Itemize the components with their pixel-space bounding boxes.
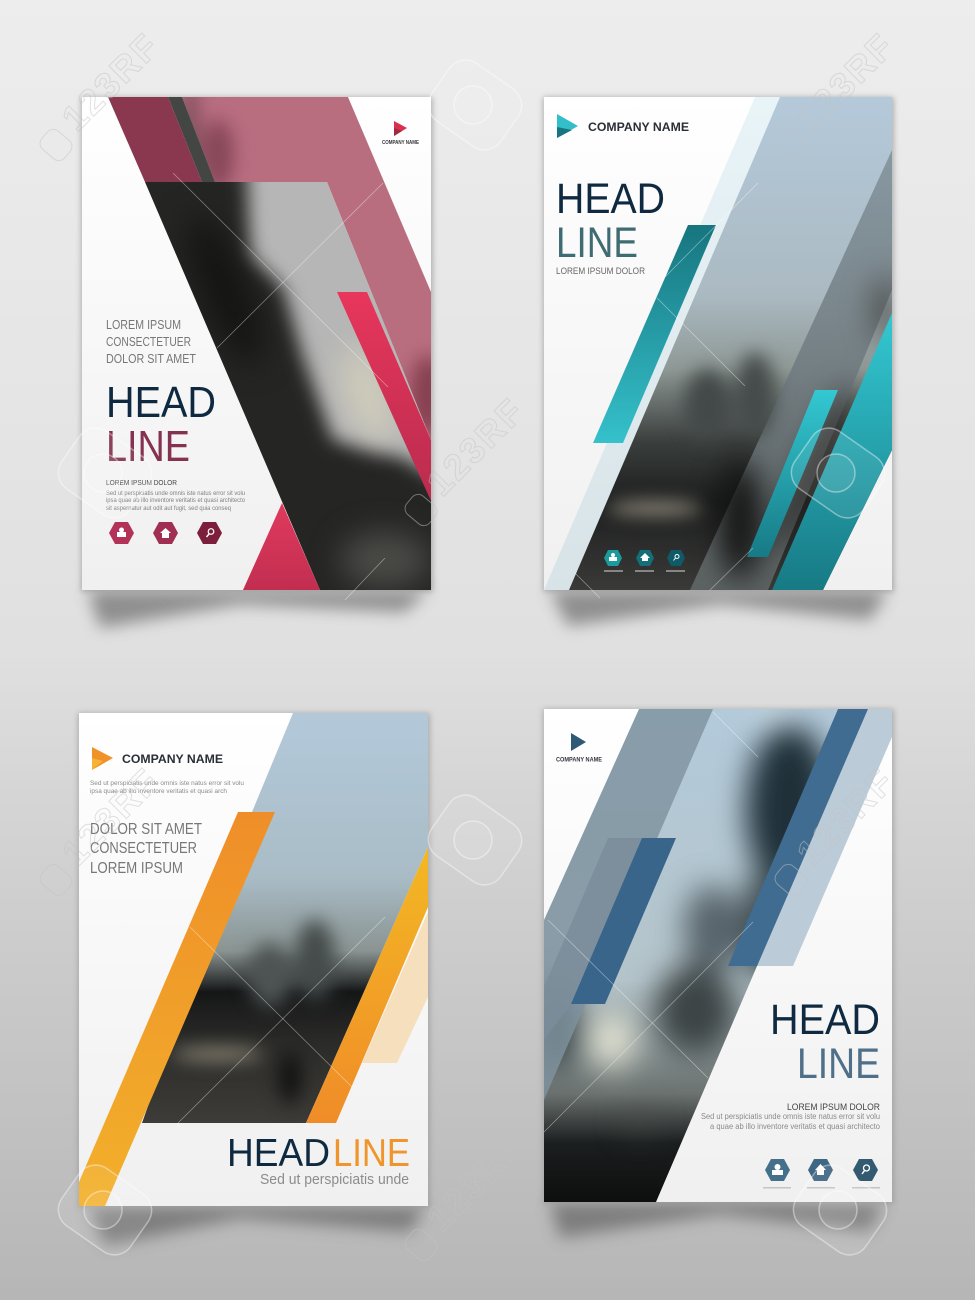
panel: teal brochure <box>544 97 897 590</box>
teal strips <box>593 225 716 443</box>
photo: blurred city blue <box>544 709 868 1202</box>
logo: COMPANY NAME <box>556 758 602 764</box>
body text: a quae ab illo inventore veritatis et quasi architecto <box>710 1122 881 1131</box>
body text: Sed ut perspiciatis unde omnis iste natus error sit volu <box>106 491 245 497</box>
subheading: LOREM IPSUM <box>90 860 183 877</box>
dark red band <box>108 97 202 182</box>
logo <box>557 114 689 138</box>
body text <box>106 478 246 512</box>
headline: HEAD <box>770 996 880 1044</box>
body text: LOREM IPSUM DOLOR <box>787 1102 880 1113</box>
body text: LOREM IPSUM DOLOR <box>106 478 178 487</box>
subheading: DOLOR SIT AMET <box>90 821 202 838</box>
subheading: LOREM IPSUM <box>106 317 181 332</box>
watermark: 123RF logos: 123RF <box>419 391 531 504</box>
tagline: Sed ut perspiciatis unde <box>260 1172 409 1188</box>
headline: LINE <box>556 219 638 267</box>
card edge shadows <box>78 97 894 1208</box>
pink triangle <box>243 503 320 590</box>
watermark: 123RF logos: 123RF <box>789 761 901 874</box>
panel: red brochure <box>82 97 431 590</box>
lower strips <box>544 838 642 1040</box>
photo: blurred city orange <box>142 713 428 1123</box>
watermark: thin cross lines <box>173 173 758 1132</box>
headline <box>106 378 216 471</box>
icons: hexagons <box>109 522 222 544</box>
icons: hexagons <box>604 550 685 572</box>
subheading: CONSECTETUER <box>90 840 197 857</box>
body text: sit aspernatur aut odit aut fugit, sed quia conseq <box>106 506 231 512</box>
pale strip <box>544 97 780 590</box>
card shadows <box>88 590 888 1246</box>
watermark: 123RF logos: 123RF <box>789 26 901 139</box>
logo <box>92 747 223 770</box>
body text: Sed ut perspiciatis unde omnis iste natus error sit volu <box>701 1112 880 1121</box>
watermark: 123RF logos: 123RF <box>54 761 166 874</box>
watermark: 123RF logos: 123RF <box>419 1126 531 1239</box>
headline <box>556 175 665 267</box>
headline <box>227 1132 410 1175</box>
icons: hexagons <box>763 1159 880 1188</box>
subheading: LOREM IPSUM DOLOR <box>556 266 645 277</box>
subheading: CONSECTETUER <box>106 334 191 349</box>
blue strip <box>728 709 868 966</box>
grey strip <box>168 97 215 182</box>
orange strips <box>79 812 275 1206</box>
logo: COMPANY NAME <box>588 120 689 134</box>
subheading: DOLOR SIT AMET <box>106 351 196 366</box>
subheading <box>90 821 202 877</box>
photo: blurred city teal <box>544 97 897 590</box>
photo: pink overlay <box>182 97 431 440</box>
headline: HEAD <box>227 1132 330 1175</box>
pink strip <box>337 292 431 501</box>
light band <box>757 709 892 966</box>
watermark: 123RF logos: 123RF <box>54 26 166 139</box>
peach strip <box>362 912 428 1063</box>
panel: orange brochure <box>79 713 428 1206</box>
logo: COMPANY NAME <box>122 752 223 766</box>
logo <box>556 733 602 764</box>
headline <box>770 996 880 1088</box>
headline: HEAD <box>106 378 216 427</box>
grey band <box>690 150 892 590</box>
logo <box>382 121 419 146</box>
panel: blue brochure <box>536 701 892 1202</box>
body text: ipsa quae ab illo inventore veritatis et quasi architecto <box>106 498 246 504</box>
body text: ipsa quae ab illo inventore veritatis et quasi arch <box>90 788 227 795</box>
photo: blurred city red <box>145 182 431 590</box>
body text <box>701 1102 881 1131</box>
headline: LINE <box>797 1040 880 1088</box>
headline: LINE <box>333 1132 410 1175</box>
logo: COMPANY NAME <box>382 140 419 146</box>
body text: Sed ut perspiciatis unde omnis iste natus error sit volu <box>90 780 244 787</box>
headline: LINE <box>106 422 190 471</box>
subheading <box>106 317 196 366</box>
body text <box>90 780 244 795</box>
grey band <box>544 709 713 1100</box>
headline: HEAD <box>556 175 665 223</box>
